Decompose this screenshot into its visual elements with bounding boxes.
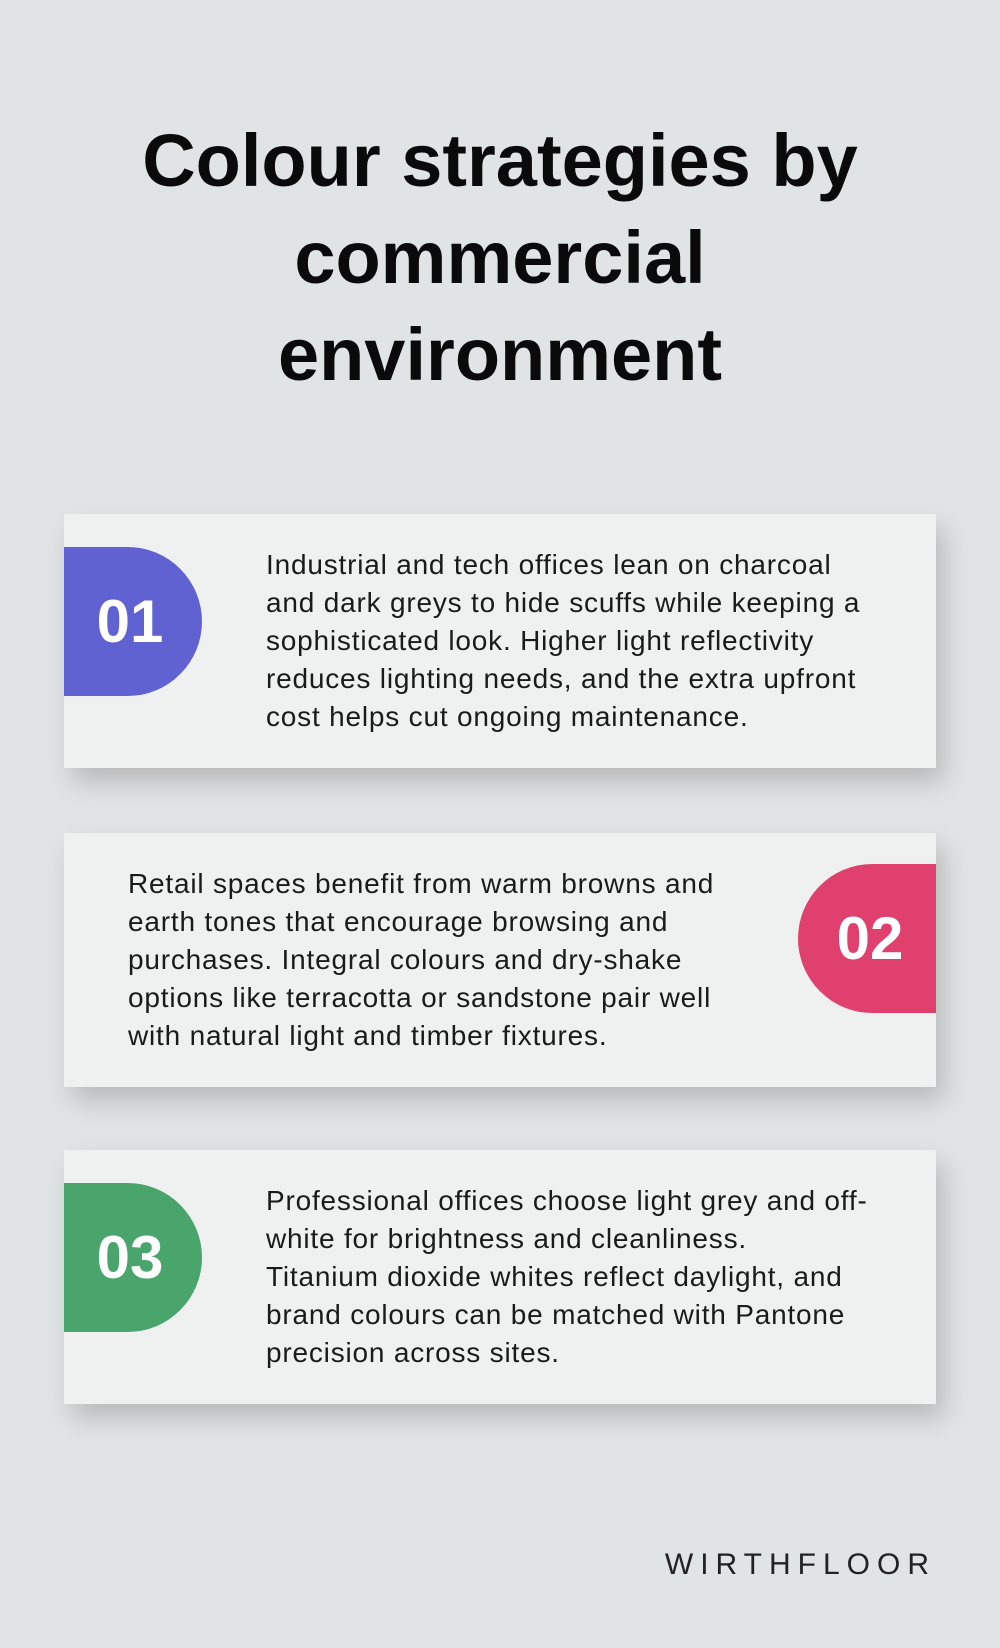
badge 01 [64,547,202,696]
text 02: earth tones that encourage browsing and [128,906,668,937]
text 03 [266,1185,868,1368]
text 01: Industrial and tech offices lean on charcoal [266,549,831,580]
title: Colour strategies by [142,119,858,202]
badge 03: 03 [97,1224,163,1291]
brand logo: WIRTHFLOOR [665,1548,936,1581]
panel: card 02 [64,833,936,1087]
text 03: white for brightness and cleanliness. [266,1223,747,1254]
title: commercial [294,216,706,299]
badge 01: 01 [97,588,163,655]
text 02: purchases. Integral colours and dry-shake [128,944,682,975]
text 01 [266,549,860,732]
title: environment [278,313,722,396]
badge 02 [798,864,936,1013]
text 02: options like terracotta or sandstone pair well [128,982,711,1013]
text 03: Professional offices choose light grey and off- [266,1185,868,1216]
panel: card 01 [64,514,936,768]
badge 02: 02 [837,905,903,972]
text 02: Retail spaces benefit from warm browns and [128,868,714,899]
badge 03 [64,1183,202,1332]
title [142,119,858,396]
text 02 [128,868,714,1051]
text 03: Titanium dioxide whites reflect daylight, and [266,1261,843,1292]
text 02: with natural light and timber fixtures. [128,1020,607,1051]
text 01: and dark greys to hide scuffs while keeping a [266,587,860,618]
text 03: precision across sites. [266,1337,560,1368]
text 01: sophisticated look. Higher light reflectivity [266,625,814,656]
text 01: cost helps cut ongoing maintenance. [266,701,749,732]
text 03: brand colours can be matched with Pantone [266,1299,845,1330]
panel: card 03 [64,1150,936,1404]
text 01: reduces lighting needs, and the extra upfront [266,663,856,694]
